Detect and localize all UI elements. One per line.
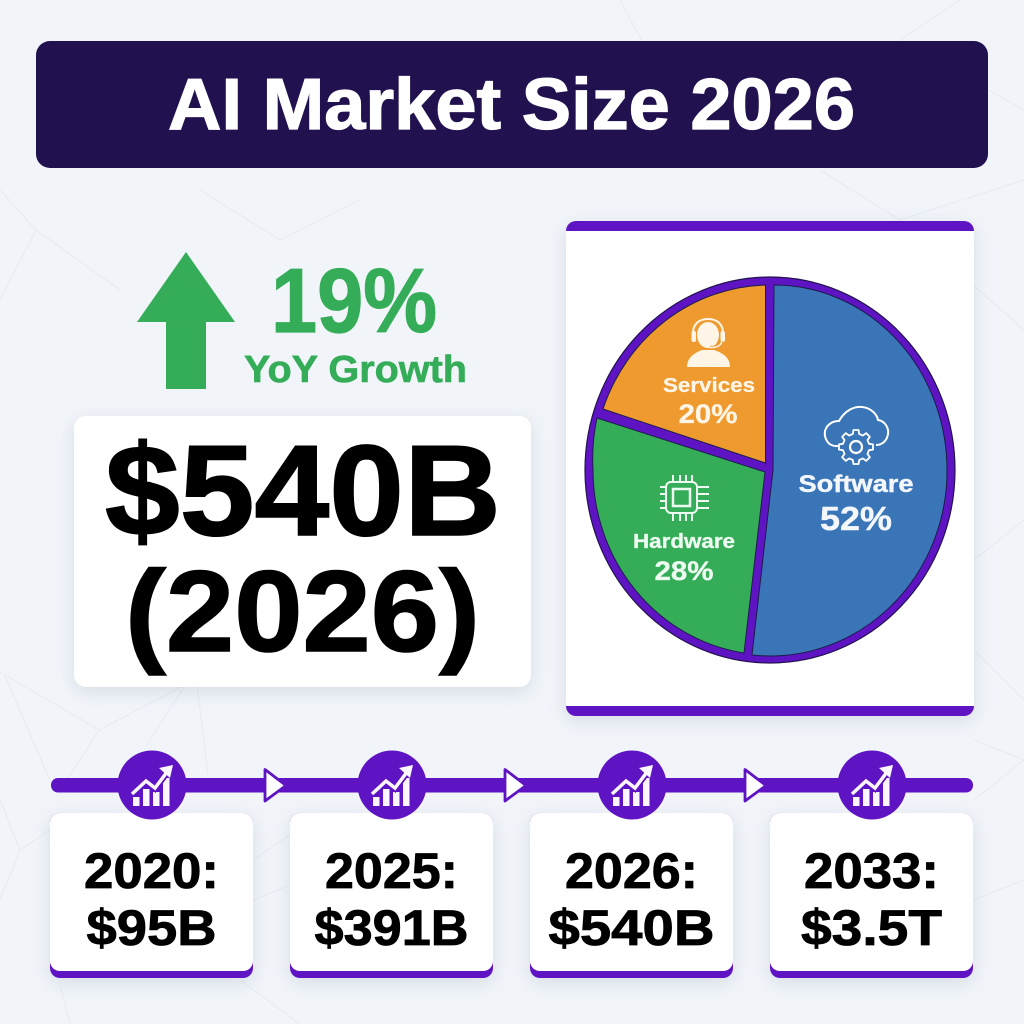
panel: headline market value — [74, 416, 531, 687]
slice: hardware — [593, 418, 765, 653]
slice: software — [752, 285, 947, 656]
growth callout — [244, 251, 467, 391]
card: 2025 — [290, 813, 493, 978]
value: services: 20% — [678, 399, 738, 429]
slice: services — [603, 285, 766, 463]
arrow: 2026 to 2033 — [745, 770, 766, 801]
icon: growth chart 2025 — [358, 750, 426, 820]
panel: market share pie — [566, 221, 974, 716]
card: 2020 — [50, 813, 253, 978]
card: 2020: 2020: — [84, 843, 219, 899]
label: software: Software — [798, 471, 914, 498]
icon: chip — [660, 475, 709, 521]
title banner — [36, 41, 988, 168]
icon: growth chart 2020 — [118, 750, 186, 820]
headline year: (2026) — [125, 548, 480, 676]
pie chart — [585, 277, 955, 663]
card: 2033: 2033: — [804, 843, 939, 899]
growth label: YoY Growth — [244, 349, 467, 391]
card: 2033 — [770, 813, 973, 978]
card: 2025: 2025: — [325, 843, 458, 899]
card: 2026: 2026: — [565, 843, 698, 899]
icon: green up arrow — [137, 252, 235, 389]
icon: growth chart 2033 — [838, 750, 906, 820]
title text: AI Market Size 2026 — [168, 65, 855, 145]
arrow: 2020 to 2025 — [265, 770, 286, 801]
headline value: $540B — [105, 419, 501, 563]
card: 2026: $540B — [548, 900, 714, 956]
label: services: Services — [663, 375, 755, 397]
card: 2020: $95B — [86, 900, 216, 956]
card: 2033: $3.5T — [801, 900, 942, 956]
card: 2026 — [530, 813, 733, 978]
icon: growth chart 2026 — [598, 750, 666, 820]
label: hardware: Hardware — [633, 531, 735, 553]
timeline line — [51, 778, 973, 792]
arrow: 2025 to 2026 — [505, 770, 526, 801]
value: software: 52% — [820, 500, 892, 537]
growth percent: 19% — [271, 251, 437, 352]
icon: support agent — [687, 319, 730, 367]
timeline — [50, 750, 973, 978]
value: hardware: 28% — [654, 556, 714, 586]
card: 2025: $391B — [314, 900, 468, 956]
icon: cloud gear — [825, 407, 888, 464]
